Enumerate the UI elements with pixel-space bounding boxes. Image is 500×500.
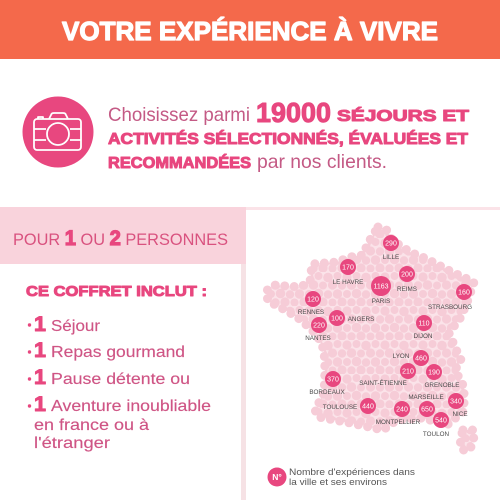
city labels: TOULON [423, 431, 450, 438]
city labels: PARIS [372, 298, 390, 305]
city markers: 100 [331, 316, 343, 322]
city labels: TOULOUSE [323, 404, 357, 411]
city markers: 460 [415, 356, 427, 362]
city markers: 220 [313, 322, 325, 330]
included list: Séjour [51, 318, 101, 335]
city markers [305, 235, 472, 428]
legend: Nombre d'expériences dans [289, 467, 415, 478]
included list: Repas gourmand [51, 344, 185, 361]
city labels: BORDEAUX [309, 389, 345, 396]
included list: 1 [34, 313, 46, 336]
intro text: par nos clients. [257, 151, 387, 173]
map of France [266, 227, 474, 450]
city markers: 440 [362, 404, 374, 410]
city labels: RENNES [298, 309, 324, 316]
city markers: 110 [418, 320, 430, 328]
city markers: 370 [327, 376, 339, 384]
city markers: 200 [401, 272, 413, 278]
city markers: 210 [402, 368, 414, 376]
city markers: 170 [342, 264, 354, 272]
city labels: LYON [393, 353, 410, 360]
city labels: MARSEILLE [408, 394, 444, 401]
intro text: SÉJOURS ET [337, 106, 469, 125]
included heading: CE COFFRET INCLUT : [26, 283, 207, 300]
mainland silhouette [266, 227, 474, 430]
legend [268, 467, 415, 488]
intro text [108, 97, 469, 173]
city labels: ANGERS [348, 316, 374, 323]
city labels: MONTPELLIER [376, 419, 421, 426]
included list: Pause détente ou [51, 371, 190, 388]
city labels: LE HAVRE [333, 279, 363, 286]
city labels: REIMS [397, 286, 417, 293]
city labels [298, 254, 472, 438]
city labels: GRENOBLE [424, 382, 460, 389]
city markers: 650 [421, 406, 433, 414]
legend: la ville et ses environs [289, 477, 387, 488]
legend: N° [272, 472, 282, 482]
intro text: Choisissez parmi [108, 104, 250, 126]
city labels: NANTES [305, 335, 331, 342]
included list [28, 313, 211, 452]
included list: l'étranger [34, 435, 111, 452]
city markers: 120 [307, 296, 319, 304]
city markers: 1163 [373, 284, 389, 290]
included list: Aventure inoubliable [51, 398, 211, 415]
header band [0, 0, 500, 59]
city labels: NICE [452, 411, 468, 418]
pink persons band [0, 207, 500, 500]
city markers: 240 [396, 406, 408, 414]
persons heading: POUR 1 OU 2 PERSONNES [13, 227, 228, 250]
icon: camera [22, 96, 94, 168]
city markers: 190 [428, 370, 440, 376]
included list: 1 [34, 393, 46, 416]
intro text: ACTIVITÉS SÉLECTIONNÉS, ÉVALUÉES ET [108, 129, 468, 148]
Corsica [460, 430, 474, 450]
city markers: 290 [385, 240, 397, 248]
city labels: LILLE [383, 254, 399, 261]
city labels: STRASBOURG [428, 304, 472, 311]
intro text: RECOMMANDÉES [108, 153, 251, 172]
included list: en france ou à [34, 417, 149, 434]
city labels: DIJON [414, 333, 433, 340]
city labels: SAINT-ÉTIENNE [359, 378, 407, 387]
city markers: 340 [450, 398, 462, 406]
intro text: 19000 [256, 97, 331, 128]
title: VOTRE EXPÉRIENCE À VIVRE [62, 16, 438, 46]
included list: 1 [34, 366, 46, 389]
included list: 1 [34, 339, 46, 362]
city markers: 540 [435, 418, 447, 424]
city markers: 160 [458, 290, 470, 296]
